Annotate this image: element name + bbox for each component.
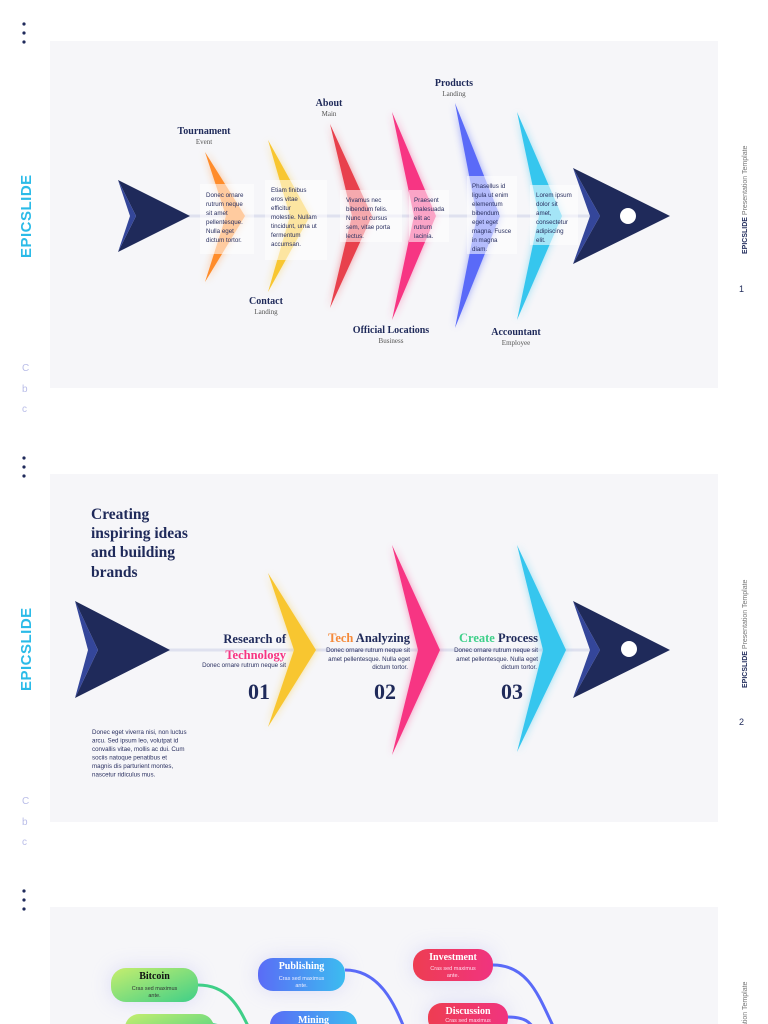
text boxes: Praesent xyxy=(414,197,439,204)
text boxes: bibendum felis. xyxy=(346,206,388,213)
sidebar slide 2: c xyxy=(22,837,27,848)
step 3: 03 xyxy=(501,679,523,704)
text boxes: accumsan. xyxy=(271,241,301,248)
right label slide 2: EPICSLIDE Presentation Template xyxy=(742,579,749,688)
step 1: Technology xyxy=(225,648,287,662)
labels: Employee xyxy=(502,339,530,347)
labels: Business xyxy=(379,337,404,345)
pill: Bitcoin: Cras sed maximus xyxy=(132,986,178,992)
text boxes: rutrum neque xyxy=(206,201,243,208)
text boxes: eros vitae xyxy=(271,196,298,203)
pill: Discussion: Cras sed maximus xyxy=(445,1018,491,1024)
sidebar slide 2 xyxy=(18,456,35,848)
labels: Official Locations xyxy=(353,325,429,336)
pill: Investment: ante. xyxy=(447,973,460,979)
step 3 xyxy=(454,631,538,704)
labels: About xyxy=(316,98,343,109)
text boxes: Etiam finibus xyxy=(271,187,306,194)
right label slide 2 xyxy=(739,579,749,727)
text boxes: elit ac xyxy=(414,215,430,222)
pill: Investment: Cras sed maximus xyxy=(430,966,476,972)
fish tail xyxy=(118,180,190,252)
labels: Event xyxy=(196,138,212,146)
panel: slide 3 background xyxy=(50,907,718,1024)
labels: Tournament xyxy=(178,126,231,137)
right label slide 1: EPICSLIDE Presentation Template xyxy=(742,145,749,254)
step 3: Donec ornare rutrum neque sit xyxy=(454,647,538,654)
step 1 xyxy=(202,632,287,704)
sidebar slide 2: C xyxy=(22,796,29,807)
text boxes: sem, vitae porta xyxy=(346,224,391,231)
pill: Bitcoin: ante. xyxy=(148,993,161,999)
labels xyxy=(178,78,541,347)
sidebar slide 2: b xyxy=(22,817,28,828)
pill: Discussion xyxy=(428,1003,508,1024)
fishbone diagram slide 1 xyxy=(118,78,670,347)
step 1: Donec ornare rutrum neque sit xyxy=(202,662,286,669)
text boxes: dolor sit xyxy=(536,201,558,208)
text boxes: elit. xyxy=(536,237,546,244)
sidebar slide 1: EPICSLIDE xyxy=(18,174,35,258)
text boxes: magna. Fusce xyxy=(472,228,512,235)
step 2: 02 xyxy=(374,679,396,704)
labels: Main xyxy=(322,110,337,118)
step 1: 01 xyxy=(248,679,270,704)
pill: Bitcoin xyxy=(111,968,198,1002)
labels: Products xyxy=(435,78,473,89)
connectors xyxy=(198,965,555,1024)
labels: Landing xyxy=(442,90,466,98)
text boxes: tincidunt, urna ut xyxy=(271,223,317,230)
text boxes: in magna xyxy=(472,237,498,244)
paragraph: nascetur ridiculus mus. xyxy=(92,772,156,778)
head xyxy=(573,601,670,698)
pill: Publishing: ante. xyxy=(295,983,308,989)
step 2: Donec ornare rutrum neque sit xyxy=(326,647,410,654)
pill: Bitcoin: Bitcoin xyxy=(139,971,170,982)
heading: and building xyxy=(91,544,175,561)
sidebar slide 2: EPICSLIDE xyxy=(18,607,35,691)
text boxes: malesuada xyxy=(414,206,445,213)
pill: Discussion: Discussion xyxy=(445,1006,491,1017)
step 3: Create Process xyxy=(459,631,538,645)
text boxes: efficitur xyxy=(271,205,291,212)
text boxes: Nulla eget xyxy=(206,228,234,235)
heading: inspiring ideas xyxy=(91,525,188,542)
tail xyxy=(75,601,170,698)
text boxes: bibendum xyxy=(472,210,499,217)
heading: brands xyxy=(91,564,138,581)
step 3: dictum tortor. xyxy=(501,664,537,671)
sidebar slide 1: C xyxy=(22,363,29,374)
text boxes: adipiscing xyxy=(536,228,564,235)
text boxes: molestie. Nullam xyxy=(271,214,317,221)
pill: Publishing: Cras sed maximus xyxy=(279,976,325,982)
heading: Creating xyxy=(91,506,150,523)
step 2: dictum tortor. xyxy=(372,664,408,671)
text boxes: lectus. xyxy=(346,233,364,240)
text boxes: Lorem ipsum xyxy=(536,192,572,199)
text boxes: consectetur xyxy=(536,219,568,226)
right label slide 1: 1 xyxy=(739,284,744,294)
step 2: Tech Analyzing xyxy=(328,631,411,645)
text boxes: lacinia. xyxy=(414,233,434,240)
step 2: amet pellentesque. Nulla eget xyxy=(328,656,410,663)
right label slide 1 xyxy=(739,145,749,294)
sidebar slide 3 xyxy=(22,889,26,911)
labels: Contact xyxy=(249,296,284,307)
text boxes: sit amet xyxy=(206,210,228,217)
paragraph: arcu. Sed ipsum leo, volutpat id xyxy=(92,738,179,744)
pill: Mining xyxy=(270,1011,357,1024)
sidebar slide 1: c xyxy=(22,404,27,415)
text boxes: pellentesque. xyxy=(206,219,243,226)
right label slide 2: 2 xyxy=(739,717,744,727)
sidebar slide 1 xyxy=(18,22,35,415)
text boxes: Phasellus id xyxy=(472,183,506,190)
step 2 xyxy=(326,631,411,704)
text boxes: dictum tortor. xyxy=(206,237,242,244)
text boxes: Nunc ut cursus xyxy=(346,215,387,222)
slide 3 mind map xyxy=(111,949,555,1024)
paragraph: magnis dis parturient montes, xyxy=(92,763,173,770)
text boxes: eget eget xyxy=(472,219,498,226)
text boxes: fermentum xyxy=(271,232,301,239)
text boxes: Vivamus nec xyxy=(346,197,381,204)
chevrons xyxy=(268,545,566,755)
paragraph: sociis natoque penatibus et xyxy=(92,754,167,762)
pill: Publishing: Publishing xyxy=(279,961,324,972)
paragraph: convallis vitae, mollis ac dui. Cum xyxy=(92,746,185,753)
sidebar slide 1: b xyxy=(22,384,28,395)
pill: Investment: Investment xyxy=(429,952,478,963)
labels: Landing xyxy=(254,308,278,316)
labels: Accountant xyxy=(491,327,541,338)
step 1: Research of xyxy=(223,632,287,646)
text boxes: diam. xyxy=(472,246,487,253)
text boxes: amet, xyxy=(536,210,552,217)
paragraph: Donec eget viverra nisi, non luctus xyxy=(92,729,187,736)
text boxes: elementum xyxy=(472,201,503,208)
fish head xyxy=(573,168,670,264)
pill: Publishing xyxy=(258,958,345,991)
text boxes: rutrum xyxy=(414,224,432,231)
panel: slide 2 background xyxy=(50,474,718,822)
pill: Investment xyxy=(413,949,493,981)
chevrons xyxy=(205,103,562,328)
text boxes xyxy=(200,176,578,260)
slide 2 process diagram xyxy=(75,506,670,778)
glows xyxy=(111,949,508,1024)
panel: slide 1 background xyxy=(50,41,718,388)
text boxes: Donec ornare xyxy=(206,192,244,199)
pill: green 2 xyxy=(125,1014,214,1024)
text boxes: ligula ut enim xyxy=(472,192,508,199)
step 3: amet pellentesque. Nulla eget xyxy=(456,656,538,663)
